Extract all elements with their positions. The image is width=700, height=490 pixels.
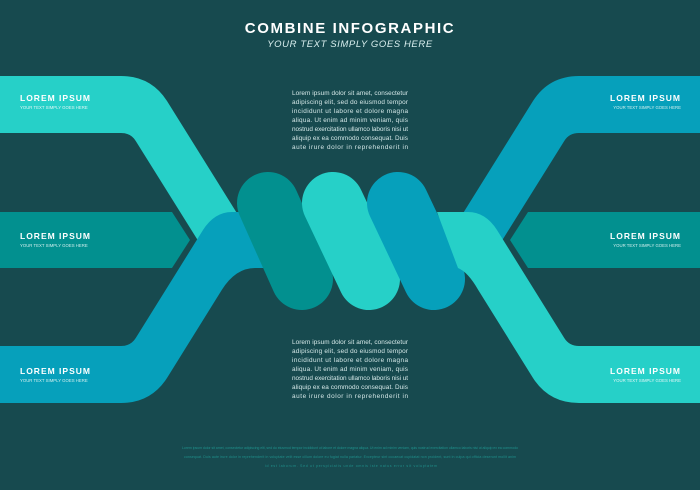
paragraph top: nostrud exercitation ullamco laboris nisi ut <box>292 126 408 133</box>
paragraph bottom: adipiscing elit, sed do eiusmod tempor <box>292 348 409 355</box>
label: right top: LOREM IPSUM <box>610 93 681 103</box>
label: left top: YOUR TEXT SIMPLY GOES HERE <box>20 105 88 110</box>
label: left middle: LOREM IPSUM <box>20 231 91 241</box>
label: left middle: YOUR TEXT SIMPLY GOES HERE <box>20 243 88 248</box>
footer text: id est laborum. Sed ut perspiciatis unde omnis iste natus error sit voluptatem <box>265 464 437 468</box>
strand: blue top-right <box>437 76 700 255</box>
pill: teal <box>268 203 302 279</box>
label: right middle: LOREM IPSUM <box>610 231 681 241</box>
paragraph top: Lorem ipsum dolor sit amet, consectetur <box>292 90 409 97</box>
paragraph bottom: incididunt ut labore et dolore magna <box>292 357 408 364</box>
paragraph bottom: aliquip ex ea commodo consequat. Duis <box>292 384 408 391</box>
strand: blue bottom-left <box>0 212 290 403</box>
footer text <box>182 446 518 468</box>
title: COMBINE INFOGRAPHIC <box>245 20 455 37</box>
label: left bottom <box>20 366 91 383</box>
middle band left <box>0 212 190 268</box>
paragraph top: aliquip ex ea commodo consequat. Duis <box>292 135 408 142</box>
label: right top: YOUR TEXT SIMPLY GOES HERE <box>613 105 681 110</box>
label: right middle: YOUR TEXT SIMPLY GOES HERE <box>613 243 681 248</box>
label: right top <box>610 93 681 110</box>
label: right bottom: LOREM IPSUM <box>610 366 681 376</box>
strand: light top-left <box>0 76 263 255</box>
paragraph bottom: Lorem ipsum dolor sit amet, consectetur <box>292 339 409 346</box>
label: right bottom <box>610 366 681 383</box>
footer text: consequat. Duis aute irure dolor in reprehenderit in voluptate velit esse cillum dolore eu fugiat nulla pariatur. Excepteur sint occaecat cupidatat non proident, sunt in culpa qui officia deserunt mollit anim <box>184 455 516 459</box>
label: left bottom: LOREM IPSUM <box>20 366 91 376</box>
label: left bottom: YOUR TEXT SIMPLY GOES HERE <box>20 378 88 383</box>
footer text: Lorem ipsum dolor sit amet, consectetur adipiscing elit, sed do eiusmod tempor incididunt ut labore et dolore magna aliqua. Ut enim ad minim veniam, quis nostrud exercitation ullamco laboris nisi ut aliquip ex ea commodo <box>182 446 518 450</box>
paragraph bottom <box>292 339 409 400</box>
label: right bottom: YOUR TEXT SIMPLY GOES HERE <box>613 378 681 383</box>
paragraph bottom: nostrud exercitation ullamco laboris nisi ut <box>292 375 408 382</box>
title: YOUR TEXT SIMPLY GOES HERE <box>267 39 433 50</box>
label: left top: LOREM IPSUM <box>20 93 91 103</box>
strand: light bottom-right <box>437 212 700 403</box>
paragraph top: aute irure dolor in reprehenderit in <box>292 144 408 151</box>
label: left middle <box>20 231 91 248</box>
paragraph top: adipiscing elit, sed do eiusmod tempor <box>292 99 409 106</box>
middle band right <box>510 212 700 268</box>
paragraph bottom: aute irure dolor in reprehenderit in <box>292 393 408 400</box>
paragraph top: incididunt ut labore et dolore magna <box>292 108 408 115</box>
paragraph bottom: aliqua. Ut enim ad minim veniam, quis <box>292 366 408 373</box>
pill: blue <box>398 203 434 279</box>
label: left top <box>20 93 91 110</box>
label: right middle <box>610 231 681 248</box>
pill: light <box>333 203 369 279</box>
paragraph top <box>292 90 409 151</box>
paragraph top: aliqua. Ut enim ad minim veniam, quis <box>292 117 408 124</box>
title <box>245 20 455 50</box>
